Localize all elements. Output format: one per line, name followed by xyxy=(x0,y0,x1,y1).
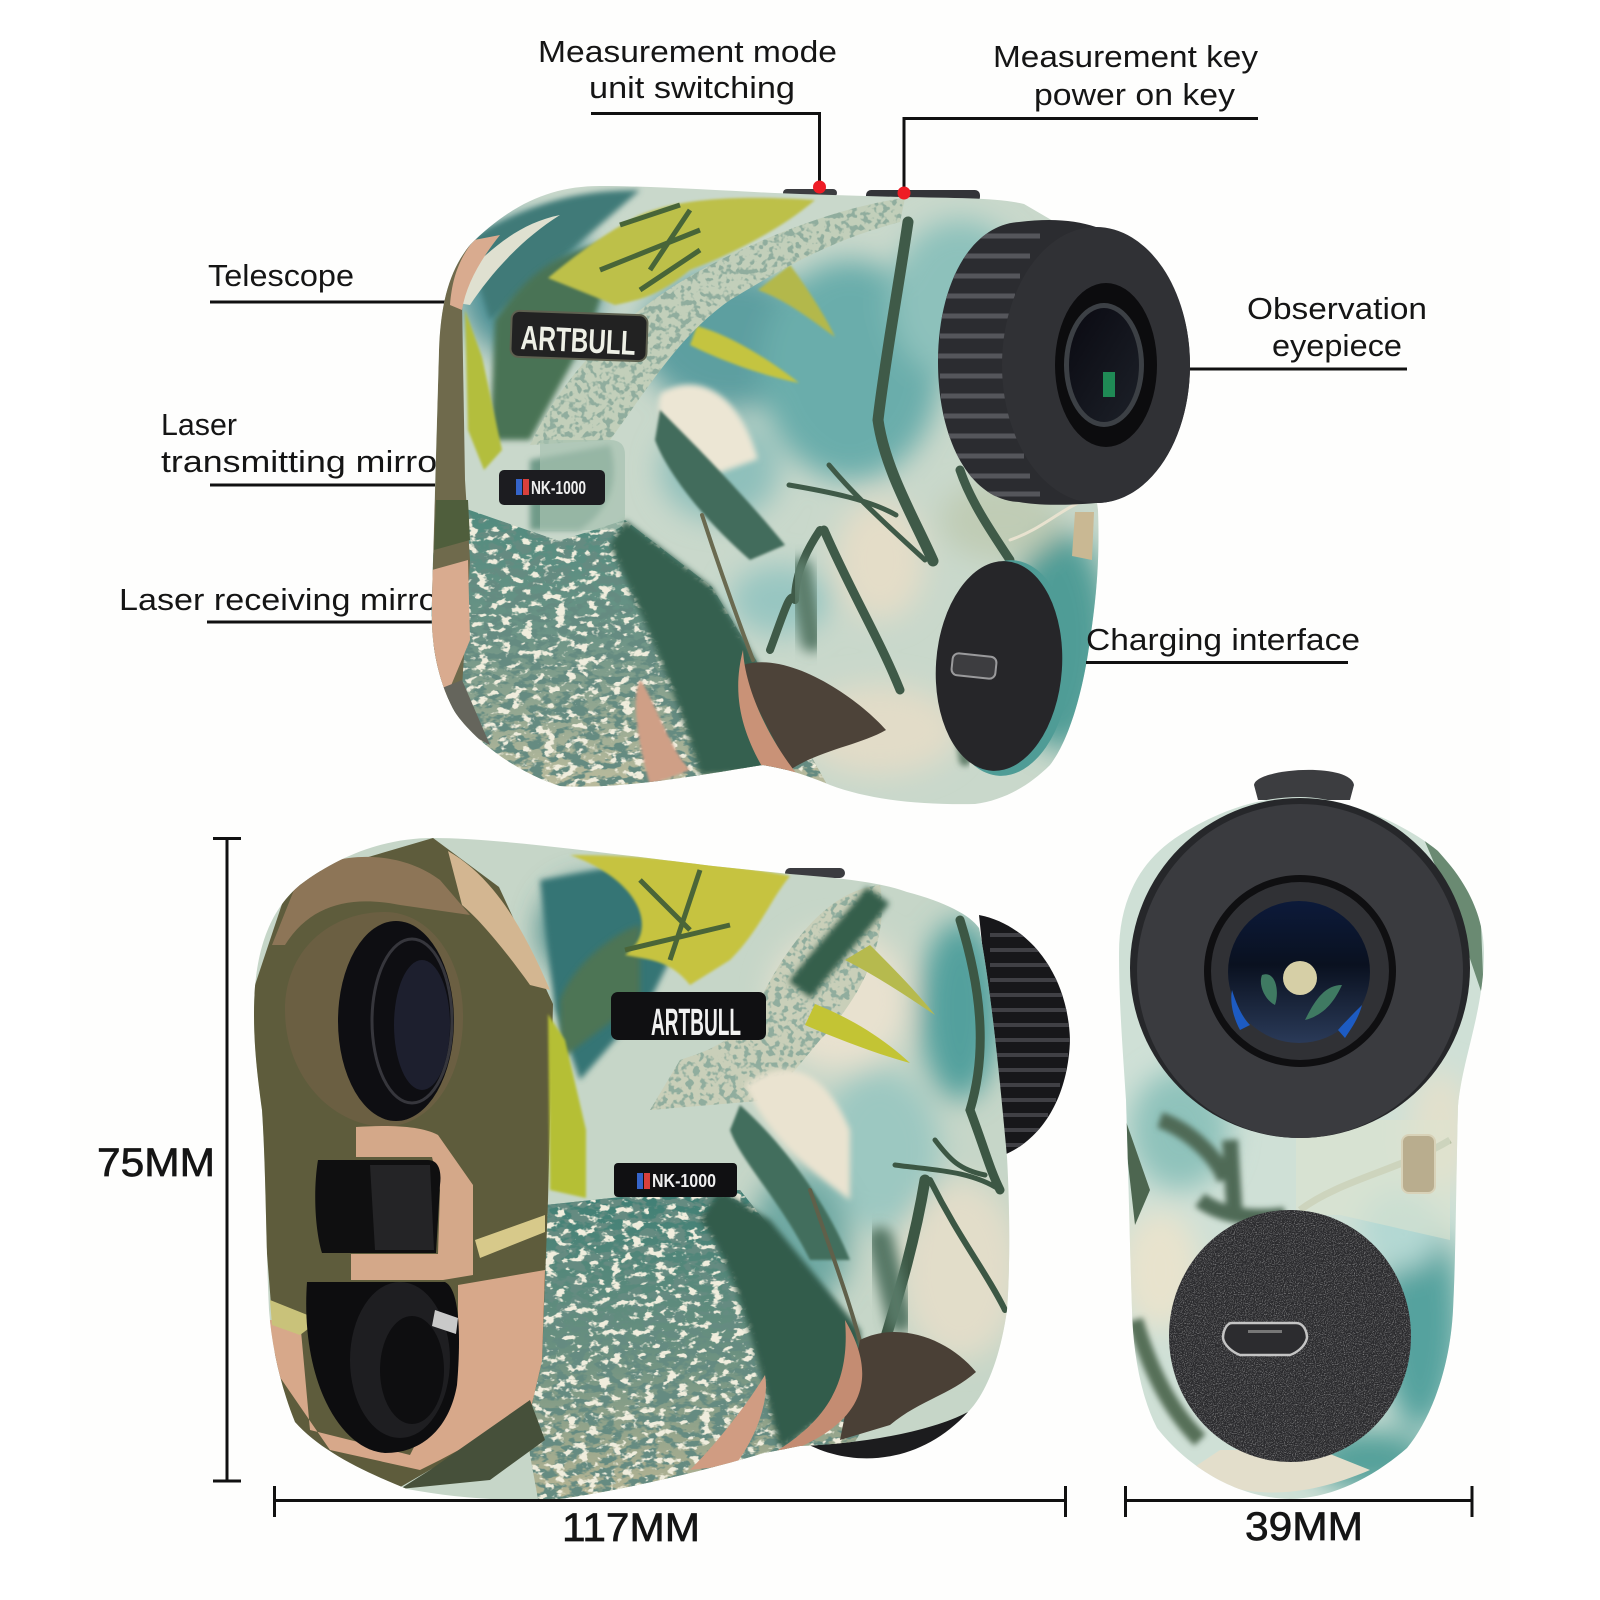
dimension: 117MM width xyxy=(274,1486,1066,1550)
callout: measurement key power on key: Measurement key xyxy=(993,39,1259,74)
dimension: 117MM width: 117MM xyxy=(562,1506,700,1550)
teal rim by cap xyxy=(972,560,1058,776)
badge: ARTBULL front: ARTBULL xyxy=(651,1002,741,1044)
callout: measurement mode unit switching xyxy=(538,34,837,187)
badge: NK-1000 top xyxy=(499,440,625,530)
middle laser window xyxy=(315,1160,440,1253)
callout: observation eyepiece xyxy=(1185,291,1427,370)
callout: observation eyepiece: Observation xyxy=(1247,291,1427,326)
button marker dots xyxy=(813,180,910,200)
callout: laser transmitting mirror: transmitting mirror xyxy=(161,444,449,479)
badge: ARTBULL front xyxy=(611,992,766,1044)
badge: NK-1000 front xyxy=(614,1163,737,1197)
twigs lower xyxy=(810,920,1005,1360)
badge: NK-1000 front: NK-1000 xyxy=(652,1171,716,1191)
bark area lower xyxy=(520,1190,880,1510)
rear charging cap with micro USB port xyxy=(1165,1205,1415,1465)
callout: measurement mode unit switching: unit switching xyxy=(589,70,795,105)
badge: ARTBULL top: ARTBULL xyxy=(520,319,637,363)
device: front three quarter view xyxy=(250,830,1070,1510)
brown leaf xyxy=(738,650,886,772)
twigs xyxy=(702,222,1085,760)
brown leaf lower xyxy=(770,1320,976,1455)
left edge strip xyxy=(432,235,502,745)
dimension: 39MM depth: 39MM xyxy=(1245,1505,1363,1549)
dimension: 75MM height: 75MM xyxy=(97,1141,215,1185)
leaf and branch layer xyxy=(440,190,920,560)
callout: measurement key power on key xyxy=(904,39,1259,193)
callout: charging interface: Charging interface xyxy=(1086,622,1360,657)
eyepiece with knurled ring xyxy=(930,215,1200,510)
callout: telescope: Telescope xyxy=(208,258,354,293)
device: top side view xyxy=(420,180,1200,820)
rear eyecup and lens xyxy=(1130,798,1470,1138)
callout: telescope xyxy=(208,258,450,304)
callout: measurement key power on key: power on key xyxy=(1034,77,1236,112)
callout: laser transmitting mirror xyxy=(161,407,449,486)
bark area xyxy=(430,500,830,800)
charging cap with port xyxy=(929,557,1069,775)
badge: NK-1000 top: NK-1000 xyxy=(531,478,586,498)
callout: observation eyepiece: eyepiece xyxy=(1272,328,1402,363)
dimension: 39MM depth xyxy=(1126,1486,1472,1549)
front face panel xyxy=(250,838,586,1489)
callout: laser transmitting mirror: Laser xyxy=(161,407,237,442)
slide switch slot xyxy=(1402,1135,1435,1193)
callout: measurement mode unit switching: Measurement mode xyxy=(538,34,837,69)
callout: laser receiving mirror: Laser receiving mirror xyxy=(119,582,449,617)
badge: ARTBULL top xyxy=(510,311,648,363)
leaf and branch layer lower xyxy=(540,855,935,1260)
dimension: 75MM height xyxy=(97,838,241,1481)
upper objective lens xyxy=(338,921,454,1121)
lower laser lens xyxy=(306,1282,459,1453)
device: rear end view xyxy=(1110,770,1500,1510)
